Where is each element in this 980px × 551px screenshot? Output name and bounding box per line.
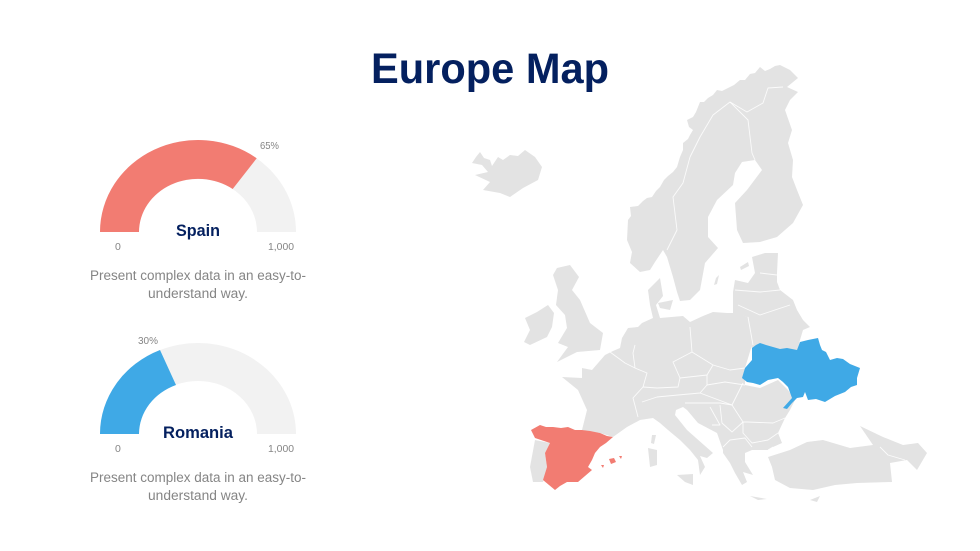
- gauge value 30%: [100, 350, 176, 434]
- title: Europe Map: [371, 45, 609, 93]
- gauge value 65%: [100, 140, 257, 232]
- Iceland: [472, 150, 542, 197]
- Zealand: [658, 300, 673, 310]
- Cyprus: [810, 496, 820, 502]
- scale minimum: 0: [115, 443, 121, 455]
- Saaremaa: [740, 262, 749, 270]
- Gotland: [714, 275, 719, 285]
- Corsica: [651, 435, 656, 444]
- Great Britain: [553, 265, 603, 362]
- country borders: [610, 87, 905, 460]
- Turkey: [768, 426, 927, 490]
- description: Present complex data in an easy-to-: [90, 268, 306, 283]
- scale maximum: 1,000: [268, 241, 294, 253]
- gauge track: [100, 140, 296, 232]
- continental Europe: [562, 278, 795, 485]
- Sardinia: [648, 448, 657, 467]
- description: understand way.: [148, 286, 248, 301]
- Portugal: [530, 440, 550, 482]
- description: understand way.: [148, 488, 248, 503]
- country name: Romania: [163, 424, 234, 442]
- scale maximum: 1,000: [268, 443, 294, 455]
- description: [90, 268, 306, 301]
- Baltics, Belarus: [733, 253, 810, 352]
- country name: Spain: [176, 222, 220, 240]
- description: Present complex data in an easy-to-: [90, 470, 306, 485]
- Crete: [750, 496, 767, 500]
- Balearic islands: [601, 456, 622, 468]
- percent label: 30%: [138, 335, 158, 347]
- scale minimum: 0: [115, 241, 121, 253]
- panel: Spain gauge: [90, 140, 306, 301]
- map of Europe: [472, 65, 927, 502]
- description: [90, 470, 306, 503]
- land: grey countries: [472, 65, 927, 502]
- Ireland: [524, 305, 554, 345]
- Sicily: [677, 474, 693, 485]
- highlighted country: Spain: [531, 425, 622, 490]
- gauge track: [100, 343, 296, 434]
- highlighted country: Ukraine: [742, 338, 860, 409]
- percent label: 65%: [260, 140, 279, 152]
- Scandinavia: [627, 65, 803, 301]
- panel: Romania gauge: [90, 335, 306, 503]
